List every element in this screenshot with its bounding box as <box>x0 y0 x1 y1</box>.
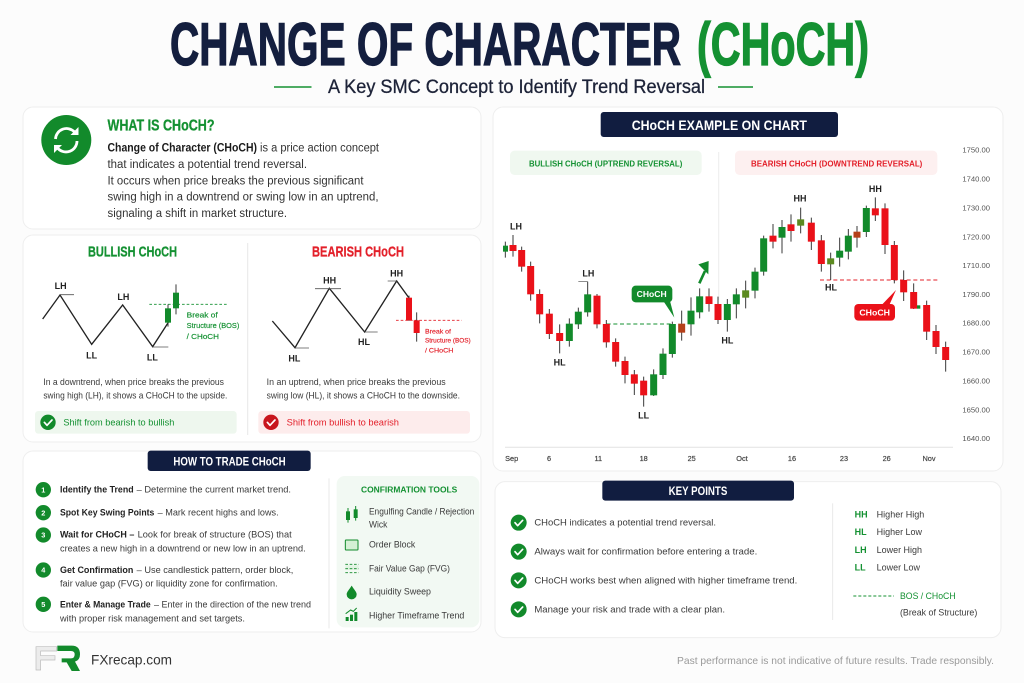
step 1 <box>36 482 291 497</box>
label: bearish reversal: BEARISH CHoCH (DOWNTREND REVERSAL) <box>751 158 923 168</box>
bullish explanation: In a downtrend, when price breaks the previous <box>43 377 224 387</box>
legend: swing abbreviations: HH <box>855 509 868 519</box>
diagram: bearish structure: HH <box>390 268 403 278</box>
definition text: swing high in a downtrend or swing low in an uptrend, <box>108 192 378 204</box>
candlesticks: right section <box>752 197 949 372</box>
label: bearish reversal <box>735 151 937 175</box>
definition text <box>108 143 380 220</box>
definition text: It occurs when price breaks the previous significant <box>108 176 364 188</box>
tool: higher timeframe trend: Higher Timeframe Trend <box>369 611 464 621</box>
definition text: that indicates a potential trend reversal. <box>108 159 307 171</box>
icon: order block <box>345 540 358 550</box>
icon: liquidity drop <box>347 586 357 599</box>
legend: BOS line <box>853 591 977 618</box>
definition text: signaling a shift in market structure. <box>108 208 287 220</box>
point 1 <box>511 515 716 531</box>
point 3 <box>511 572 797 588</box>
bearish explanation <box>267 377 460 401</box>
step 3: creates a new high in a downtrend or new low in an uptrend. <box>60 544 306 554</box>
badge: shift bullish to bearish <box>258 411 470 434</box>
step 2: 2 <box>41 508 45 517</box>
swing labels: left section: LH <box>510 222 522 232</box>
icon: fair value gap <box>345 564 359 573</box>
disclaimer: Past performance is not indicative of future results. Trade responsibly. <box>677 655 994 667</box>
step 3: Wait for CHoCH – <box>60 530 134 540</box>
swing labels: left section <box>510 222 734 420</box>
tool: engulfing candle: Wick <box>369 519 388 529</box>
swing labels: right section: HH <box>869 184 882 194</box>
swing labels: right section <box>794 184 882 293</box>
diagram: bullish structure: LH <box>55 281 67 291</box>
date axis: 6 <box>547 454 551 463</box>
diagram: bullish structure: LH <box>117 292 129 302</box>
swing labels: left section: LL <box>638 410 650 420</box>
diagram: bearish structure: Structure (BOS) <box>425 338 471 345</box>
price axis: 1740.00 <box>962 175 990 184</box>
step 5: with proper risk management and set targets. <box>59 613 245 623</box>
brand name: FXrecap.com <box>91 652 172 668</box>
step 3 <box>36 527 306 554</box>
diagram: bearish structure: HL <box>358 337 370 347</box>
point 2 <box>511 544 757 560</box>
legend: swing abbreviations: LL <box>855 563 866 573</box>
heading: key points: KEY POINTS <box>669 485 728 498</box>
point 4: Manage your risk and trade with a clear plan. <box>534 604 725 614</box>
price axis: 1720.00 <box>962 232 990 241</box>
badge: shift bullish to bearish: Shift from bullish to bearish <box>287 417 399 427</box>
date axis: 11 <box>595 454 602 463</box>
step 4: fair value gap (FVG) or liquidity zone for confirmation. <box>60 579 278 589</box>
price axis: 1710.00 <box>962 261 990 270</box>
legend: swing abbreviations <box>855 509 924 573</box>
step 4 <box>36 562 293 589</box>
heading: bearish CHoCH: BEARISH CHoCH <box>312 244 404 260</box>
heading: chart example: CHoCH EXAMPLE ON CHART <box>632 117 807 133</box>
step 4: Get Confirmation <box>60 565 133 575</box>
definition text: is a price action concept <box>260 143 380 155</box>
step 1: Identify the Trend <box>60 485 134 495</box>
candlesticks: left section <box>503 235 749 407</box>
label: bullish reversal: BULLISH CHoCH (UPTREND REVERSAL) <box>529 158 683 168</box>
step 1: 1 <box>41 485 45 494</box>
step 5: Enter & Manage Trade <box>60 599 151 609</box>
panel: bullish and bearish diagrams <box>23 235 481 442</box>
point 2: Always wait for confirmation before entering a trade. <box>534 547 757 557</box>
legend: swing abbreviations: Higher Low <box>877 527 922 537</box>
tool: order block: Order Block <box>369 540 416 550</box>
callout: bullish CHoCH <box>632 286 674 318</box>
price axis: 1650.00 <box>962 405 990 414</box>
tool: engulfing candle <box>369 506 474 529</box>
badge: shift bearish to bullish <box>35 411 237 434</box>
swing labels: left section: HL <box>554 358 566 368</box>
bearish explanation: swing low (HL), it shows a CHoCH to the downside. <box>267 391 460 401</box>
date axis: 25 <box>688 454 696 463</box>
diagram: bearish structure: / CHoCH <box>425 348 454 355</box>
heading: chart example <box>601 112 838 137</box>
price axis: 1670.00 <box>962 348 990 357</box>
step 5: – Enter in the direction of the new trend <box>154 599 311 609</box>
date axis <box>505 454 936 463</box>
badge: shift bearish to bullish: Shift from bearish to bullish <box>63 417 174 427</box>
date axis: 18 <box>640 454 648 463</box>
legend: swing abbreviations: Lower High <box>877 545 922 555</box>
diagram: bearish structure <box>272 268 471 363</box>
tool: fair value gap: Fair Value Gap (FVG) <box>369 563 450 573</box>
bearish explanation: In an uptrend, when price breaks the previous <box>267 377 446 387</box>
title: CHANGE OF CHARACTER <box>170 11 681 78</box>
heading: how to trade: HOW TO TRADE CHoCH <box>173 455 286 468</box>
step 3: 3 <box>41 531 45 540</box>
diagram: bullish structure: / CHoCH <box>187 332 219 341</box>
price axis <box>962 146 990 443</box>
step 3: Look for break of structure (BOS) that <box>138 530 292 540</box>
icon: higher timeframe <box>346 608 357 621</box>
step 2: – Mark recent highs and lows. <box>158 508 279 518</box>
price axis: 1750.00 <box>962 146 990 155</box>
point 3: CHoCH works best when aligned with higher timeframe trend. <box>534 575 797 585</box>
point 1: CHoCH indicates a potential trend reversal. <box>534 518 716 528</box>
panel: what is CHoCH <box>23 107 481 229</box>
tool: engulfing candle: Engulfing Candle / Rejection <box>369 506 474 516</box>
heading: how to trade <box>148 451 311 471</box>
step 4: – Use candlestick pattern, order block, <box>137 565 293 575</box>
price axis: 1730.00 <box>962 203 990 212</box>
diagram: bearish structure: Break of <box>425 328 451 335</box>
diagram: bullish structure: LL <box>86 350 98 360</box>
price axis: 1790.00 <box>962 290 990 299</box>
callout: bullish CHoCH: CHoCH <box>637 289 667 299</box>
step 5 <box>36 597 311 623</box>
step 4: 4 <box>41 566 46 575</box>
heading: bullish CHoCH: BULLISH CHoCH <box>88 244 177 260</box>
date axis: Sep <box>505 454 518 463</box>
legend: BOS line: BOS / CHoCH <box>900 591 956 601</box>
title: (CHoCH) <box>697 11 869 78</box>
price axis: 1680.00 <box>962 319 990 328</box>
diagram: bearish structure: HL <box>288 353 301 363</box>
step 5: 5 <box>41 600 45 609</box>
callout: bearish CHoCH: CHoCH <box>859 308 890 318</box>
legend: swing abbreviations: HL <box>855 527 867 537</box>
definition text: Change of Character (CHoCH) <box>108 143 257 155</box>
panel: confirmation tools <box>337 476 479 627</box>
panel: chart example <box>493 107 1003 471</box>
swing labels: right section: HH <box>794 194 806 204</box>
panel: how to trade <box>23 451 481 632</box>
date axis: Oct <box>736 454 748 463</box>
heading: confirmation tools: CONFIRMATION TOOLS <box>361 485 458 494</box>
icon: reversal arrows <box>41 115 91 165</box>
logo: FXrecap <box>36 646 80 671</box>
diagram: bullish structure: LL <box>147 352 158 362</box>
panel: key points <box>495 481 1001 638</box>
icon: candles <box>346 506 358 523</box>
arrow: upward reversal <box>698 261 709 283</box>
heading: what is CHoCH: WHAT IS CHoCH? <box>108 118 214 134</box>
step 2: Spot Key Swing Points <box>60 508 154 518</box>
legend: swing abbreviations: Higher High <box>877 509 924 519</box>
date axis: Nov <box>922 454 936 463</box>
date axis: 26 <box>883 454 891 463</box>
diagram: bullish structure: Break of <box>187 310 219 319</box>
callout: bearish CHoCH <box>854 290 896 321</box>
label: bullish reversal <box>510 151 702 175</box>
swing labels: left section: LH <box>582 269 594 279</box>
step 1: – Determine the current market trend. <box>137 485 291 495</box>
date axis: 23 <box>840 454 848 463</box>
price axis: 1640.00 <box>962 434 990 443</box>
step 2 <box>36 505 279 520</box>
subtitle: A Key SMC Concept to Identify Trend Reversal <box>328 77 705 98</box>
bullish explanation: swing high (LH), it shows a CHoCH to the upside. <box>43 391 227 401</box>
heading: key points <box>602 481 794 501</box>
point 4 <box>511 601 725 617</box>
diagram: bearish structure: HH <box>323 276 336 286</box>
diagram: bullish structure: Structure (BOS) <box>187 321 239 330</box>
legend: swing abbreviations: Lower Low <box>877 563 921 573</box>
legend: swing abbreviations: LH <box>855 545 867 555</box>
diagram: bullish structure <box>43 281 239 362</box>
date axis: 16 <box>788 454 796 463</box>
swing labels: right section: HL <box>825 283 837 293</box>
legend: BOS line: (Break of Structure) <box>900 608 977 618</box>
swing labels: left section: HL <box>721 335 734 345</box>
price axis: 1660.00 <box>962 376 990 385</box>
bullish explanation <box>43 377 227 401</box>
tool: liquidity sweep: Liquidity Sweep <box>369 587 431 597</box>
